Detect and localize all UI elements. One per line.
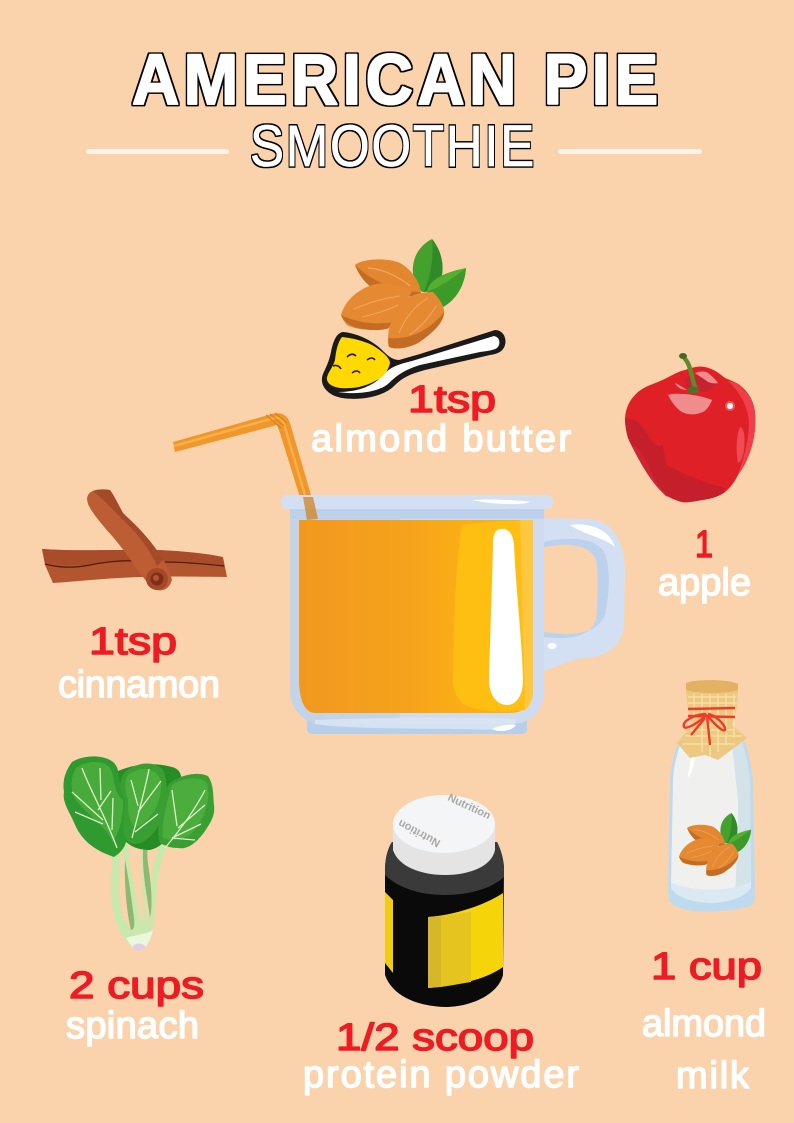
label: spinach: spinach xyxy=(66,1005,199,1047)
liquid highlight xyxy=(489,529,523,705)
label: protein powder: protein powder xyxy=(303,1054,579,1096)
label: almond milk: milk xyxy=(676,1055,750,1097)
label: protein powder xyxy=(303,1017,579,1096)
icon: spinach xyxy=(63,756,214,950)
jar label xyxy=(428,893,503,988)
icon: almond milk bottle xyxy=(668,680,755,912)
title: AMERICAN PIE xyxy=(132,41,658,120)
bottle glass xyxy=(668,742,755,912)
subtitle with divider lines xyxy=(86,114,702,179)
burlap cover xyxy=(677,690,747,760)
label: apple: apple xyxy=(658,562,751,604)
label: apple: 1 xyxy=(695,524,713,566)
icon: apple xyxy=(625,353,755,502)
straw inside glass rim xyxy=(303,497,318,520)
spinach left leaf xyxy=(63,756,130,857)
spinach back leaf xyxy=(112,764,182,850)
label: apple xyxy=(658,524,751,604)
label: cinnamon: cinnamon xyxy=(58,664,220,706)
spinach stems xyxy=(111,838,167,948)
label: cinnamon: 1tsp xyxy=(89,621,177,663)
icon: drinking straw xyxy=(173,413,318,520)
red twine bow xyxy=(684,708,735,745)
icon: cinnamon sticks xyxy=(42,489,227,590)
mug handle xyxy=(544,518,625,671)
label: almond butter: almond butter xyxy=(311,418,571,460)
icon: almonds with leaves xyxy=(341,239,466,348)
smoothie liquid xyxy=(299,520,533,713)
icon: protein powder jar: Nutrition xyxy=(446,792,493,822)
label: cinnamon xyxy=(58,621,220,706)
mug body xyxy=(290,505,544,724)
label: almond milk: almond xyxy=(642,1003,766,1045)
label: almond milk: 1 cup xyxy=(651,946,762,988)
almonds on bottle xyxy=(679,813,751,876)
label: almond butter: 1tsp xyxy=(408,379,496,421)
label: spinach: 2 cups xyxy=(69,965,204,1007)
label: spinach xyxy=(66,965,204,1047)
spinach right leaf xyxy=(158,774,214,848)
mug rim xyxy=(281,495,553,509)
subtitle with divider lines: SMOOTHIE xyxy=(250,114,534,179)
spinach middle leaf xyxy=(120,763,167,844)
icon: spoon of almond butter xyxy=(322,330,506,399)
base shine xyxy=(315,717,516,730)
jar body xyxy=(385,842,504,1007)
icon: mug of smoothie xyxy=(281,495,625,734)
label: protein powder: 1/2 scoop xyxy=(336,1017,534,1059)
jar lid xyxy=(393,824,495,875)
icon: protein powder jar: Nutrition xyxy=(396,817,442,849)
label: almond milk xyxy=(642,946,766,1097)
icon: protein powder jar xyxy=(385,792,504,1007)
label: almond butter xyxy=(311,379,571,460)
mug foot xyxy=(307,715,527,734)
